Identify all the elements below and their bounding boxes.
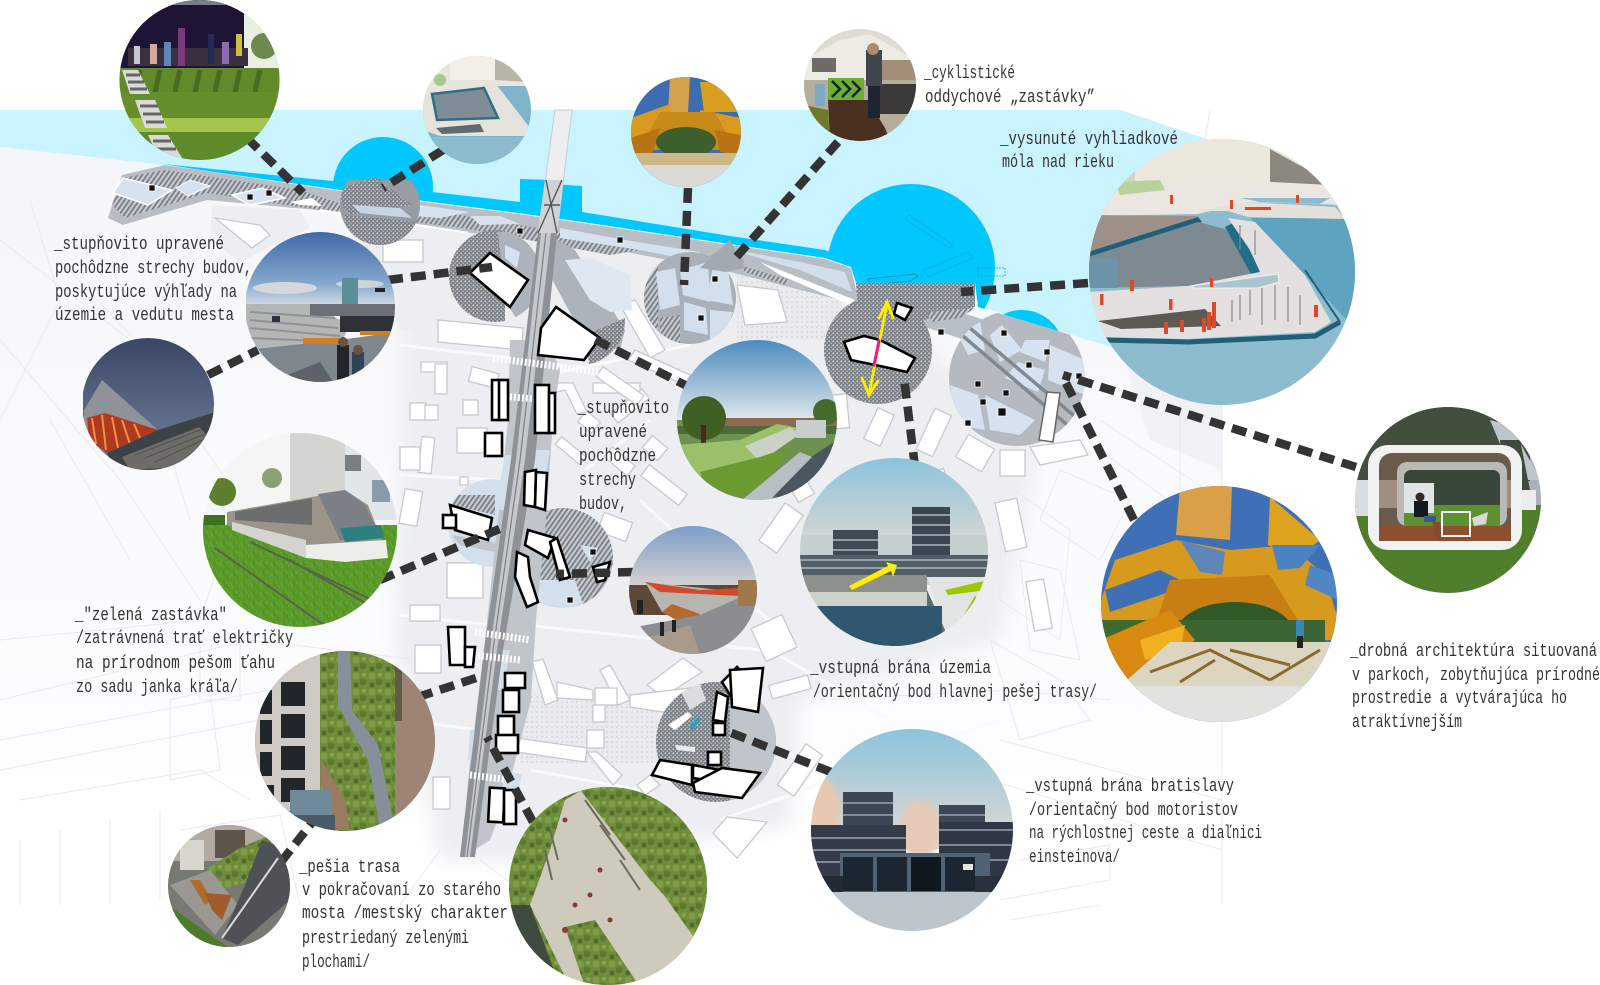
black-outlined key buildings	[443, 253, 915, 824]
caption: stepped roofs left: územie a vedutu mesta	[55, 306, 234, 326]
caption: stepped roofs left: poskytujúce výhľady na	[55, 283, 237, 303]
caption: stepped roofs left	[53, 235, 252, 326]
caption: stepped roofs center: upravené	[579, 423, 647, 443]
riverside promenade	[108, 165, 1085, 380]
central boulevard and old bridge	[460, 110, 600, 858]
caption: stepped roofs center: _stupňovito	[577, 399, 669, 419]
caption: territory gateway: /orientačný bod hlavnej pešej trasy/	[813, 683, 1097, 703]
photo: terrace with wooden benches	[168, 825, 290, 950]
caption: green stop: na prírodnom pešom ťahu	[76, 654, 275, 674]
photo: concert on grass terraces	[119, 0, 284, 162]
caption: green stop: /zatrávnená trať električky	[76, 629, 293, 649]
photo: small plaza with stepped building	[629, 526, 758, 654]
caption: stepped roofs center: budov,	[579, 495, 627, 515]
photo: small pier model	[423, 56, 533, 167]
white bus-shaped building	[1039, 392, 1060, 442]
photo: golden pavilion large	[1101, 486, 1339, 726]
caption: pedestrian route	[298, 858, 508, 973]
caption: viewing piers: _vysunuté vyhliadkové	[999, 130, 1178, 150]
caption: pedestrian route: _pešia trasa	[298, 858, 400, 878]
white building footprints	[215, 218, 1088, 858]
caption: stepped roofs center: pochôdzne	[579, 447, 656, 467]
caption: stepped roofs center: strechy	[579, 471, 636, 491]
caption: green stop	[74, 606, 293, 698]
caption: green stop: _"zelená zastávka"	[74, 606, 227, 626]
caption: territory gateway: _vstupná brána územia	[809, 659, 991, 679]
caption: stepped roofs center	[577, 399, 669, 515]
circled intervention zones	[333, 177, 1090, 804]
photo: dusk building with red windows	[83, 338, 215, 472]
caption: Bratislava gateway: _vstupná brána bratislavy	[1025, 777, 1234, 797]
caption: Bratislava gateway	[1025, 777, 1262, 868]
photo: tram on grass track	[203, 433, 398, 630]
caption: viewing piers	[999, 130, 1178, 173]
caption: stepped roofs left: _stupňovito upravené	[53, 235, 224, 255]
photo: large pier model	[1088, 139, 1356, 407]
caption: green stop: zo sadu janka kráľa/	[76, 678, 238, 698]
caption: cycling stops	[923, 64, 1095, 108]
photo: aerial view of planted promenade	[509, 787, 710, 985]
caption: cycling stops: _cyklistické	[923, 64, 1015, 84]
caption: pedestrian route: v pokračovaní zo starého	[302, 881, 501, 901]
white roads between blocks	[400, 345, 1000, 820]
caption: pedestrian route: mosta /mestský charakter	[302, 904, 508, 924]
caption: pedestrian route: plochami/	[302, 953, 370, 973]
photo: roof plaza with steps	[246, 232, 396, 385]
pale street network	[0, 110, 1222, 920]
photo: white pavilion in park	[1355, 406, 1541, 595]
photo: territory gateway render	[800, 458, 988, 650]
caption: small architecture: atraktívnejším	[1352, 713, 1462, 733]
caption: stepped roofs left: pochôdzne strechy budov,	[55, 259, 252, 279]
photo: green terraced roof park	[677, 340, 839, 500]
caption: Bratislava gateway: /orientačný bod motoristov	[1029, 801, 1238, 821]
photo: golden pavilion small	[631, 77, 741, 189]
caption: Bratislava gateway: na rýchlostnej ceste a diaľnici	[1029, 824, 1262, 844]
gray road junction south of bridge	[545, 232, 625, 350]
caption: Bratislava gateway: einsteinova/	[1029, 848, 1120, 868]
caption: cycling stops: oddychové „zastávky”	[925, 88, 1095, 108]
yellow double arrow with magenta link	[862, 302, 893, 395]
caption: territory gateway	[809, 659, 1097, 703]
caption: small architecture	[1349, 642, 1600, 733]
photo: cycling rest stop	[804, 29, 916, 141]
river Danube water	[0, 110, 1250, 394]
photo: elevated greenway between buildings	[255, 651, 440, 835]
dashed connector lines	[208, 138, 1356, 862]
caption: viewing piers: móla nad rieku	[1002, 153, 1114, 173]
photo: Bratislava gateway render	[810, 729, 1014, 934]
land base of the map	[0, 147, 1222, 905]
caption: pedestrian route: prestriedaný zelenými	[302, 929, 469, 949]
